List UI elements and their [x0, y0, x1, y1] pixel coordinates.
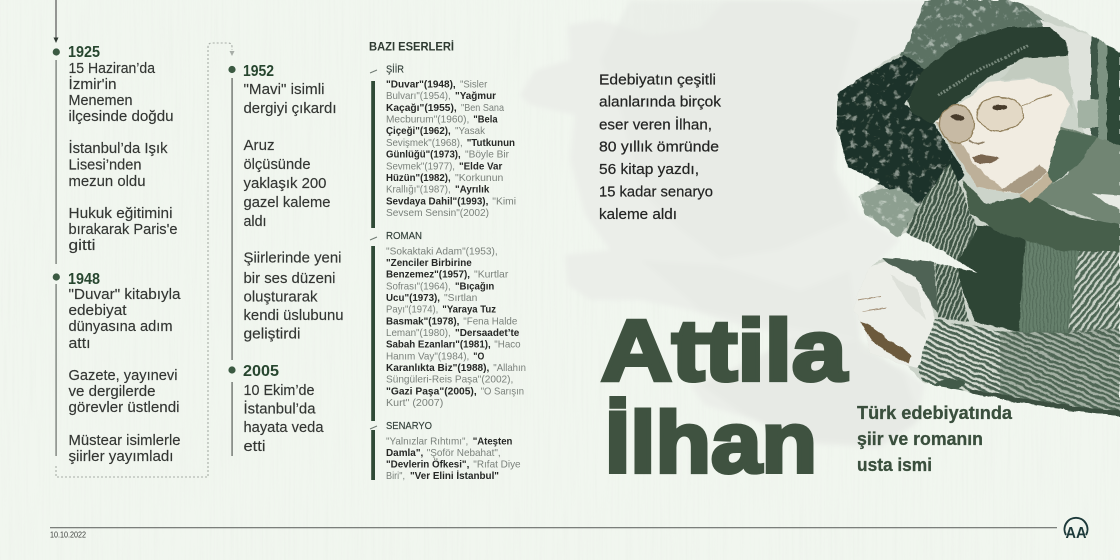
works list: "Sırtlan [444, 293, 477, 304]
section: Şiir [370, 63, 516, 228]
entry: 2005: etti [244, 438, 266, 455]
works list: "Ver Elini İstanbul" [410, 469, 499, 482]
works list: "Elde Var [459, 161, 502, 172]
works list: "Böyle Bir [465, 150, 510, 161]
works list: "Tutkunun [467, 138, 515, 149]
icon: dashed connector arrowhead [230, 51, 234, 56]
icon: AA logo: AA [1066, 525, 1086, 542]
works list: "Ayrılık [455, 185, 490, 196]
works list: "Allahın [493, 363, 526, 374]
works list: Sofrası"(1964), [386, 281, 451, 292]
scarf highlight [1093, 193, 1120, 212]
entry: 1925: ilçesinde doğdu [68, 108, 174, 125]
works list: Karanlıkta Biz"(1988), [386, 363, 489, 374]
works list: "Dersaadet’te [455, 328, 520, 339]
sleeve [918, 318, 1120, 420]
works list: "Yalnızlar Rıhtımı", [386, 436, 468, 447]
entry: 1948: "Duvar" kitabıyla [68, 286, 181, 303]
entry: 1952: Aruz [244, 137, 274, 154]
timeline connector: arrow into 1925 [54, 0, 58, 43]
works list: Kurt" (2007) [386, 398, 443, 409]
works list: "Rıfat Diye [473, 459, 521, 470]
dashed connector between timeline columns [56, 43, 232, 477]
entry: 1952: dergiyi çıkardı [244, 100, 336, 117]
bottom torn dark fringe [970, 392, 1120, 414]
intro paragraph: kaleme aldı [599, 207, 677, 223]
entry: 1952: gazel kaleme [244, 194, 330, 211]
hand [851, 262, 935, 368]
entry: 1952: oluşturarak [244, 288, 318, 306]
section tick and bar [370, 70, 377, 228]
entry: 1952: geliştirdi [244, 326, 300, 342]
section label: ROMAN [386, 231, 422, 242]
works list: Çiçeği"(1962), [386, 126, 451, 137]
entry: 1952: "Mavi" isimli [244, 81, 324, 98]
heading: Bazı Eserleri: BAZI ESERLERİ [369, 40, 454, 54]
works list: "Devlerin Öfkesi", [386, 457, 469, 470]
works list [386, 80, 516, 219]
shirt [955, 225, 1028, 335]
timeline rails [231, 78, 233, 456]
works list: "Ateşten [473, 436, 512, 447]
subtitle: usta ismi [857, 455, 932, 475]
entry: 1952: kendi üslubunu [244, 307, 344, 324]
works list: "O Sarışın [481, 386, 524, 397]
portrait photo [830, 0, 1120, 420]
works list: "Fena Halde [463, 316, 518, 327]
works list: Biri", [386, 471, 405, 482]
coat lapel [905, 163, 978, 322]
entry: 1952: Şiirlerinde yeni [244, 250, 342, 266]
works list: Basmak"(1978), [386, 316, 459, 327]
entry: 1948: attı [68, 335, 90, 352]
entry: 1925: bırakarak Paris'e [68, 221, 178, 238]
cigarette [860, 322, 912, 364]
entry: 1925: İstanbul’da Işık [68, 139, 168, 157]
entry: 2005 [243, 363, 324, 455]
hat [908, 27, 1068, 124]
works list: Benzemez"(1957), [386, 270, 470, 281]
entry: 1952: 1952 [243, 63, 274, 80]
works list: "Gazi Paşa"(2005), [386, 386, 477, 397]
subtitle [857, 403, 1013, 475]
face [936, 78, 1069, 194]
entry: 1948: Gazete, yayınevi [68, 367, 178, 384]
scarf neck side [1048, 130, 1098, 184]
entry: 1948: şiirler yayımladı [68, 448, 174, 465]
works list: "Ben Sana [461, 103, 504, 114]
entry: 1925: mezun oldu [68, 173, 146, 190]
timeline column 2 [228, 63, 344, 456]
scarf shoulder [1036, 126, 1120, 224]
intro paragraph: 15 kadar senaryo [599, 185, 713, 201]
works list: Sevmek"(1977), [386, 161, 455, 172]
entry: 1925: Menemen [68, 92, 132, 109]
works list: Krallığı"(1987), [386, 185, 451, 196]
icon: AA logo [1064, 518, 1088, 542]
entry: 1948: dünyasına adım [68, 318, 172, 335]
entry: 1952 [243, 63, 344, 342]
works list: "Yaraya Tuz [442, 305, 496, 316]
watercolor wash [520, 0, 930, 448]
subtitle: Türk edebiyatında [857, 403, 1013, 423]
works list: "Bela [473, 114, 498, 126]
timeline rails [55, 60, 57, 456]
works list: Sevsem Sensin"(2002) [386, 208, 489, 219]
entry: 1925: 15 Haziran’da [68, 60, 156, 77]
entry: 2005: 10 Ekim’de [244, 382, 314, 399]
hat band [938, 46, 1028, 96]
hand shading [890, 275, 925, 320]
entry: 1948 [68, 271, 181, 465]
mouth [972, 155, 1000, 163]
works list: "Bıçağın [455, 281, 494, 292]
works list: Sevdaya Dahil"(1993), [386, 196, 488, 207]
sleeve shading [1000, 328, 1120, 420]
works list: "Zenciler Birbirine [386, 258, 472, 269]
entry: 1925: gitti [68, 237, 96, 254]
title: Attila: Attila [601, 303, 848, 399]
entry: 1952: aldı [244, 213, 266, 230]
section tick and bar [370, 237, 377, 421]
entry: 2005: hayata veda [244, 419, 324, 436]
works list: Mecburum"(1960), [386, 114, 469, 126]
timeline column 1 [53, 44, 181, 465]
hair [1000, 55, 1072, 110]
entry: 1952: yaklaşık 200 [244, 175, 326, 192]
glasses [940, 94, 1052, 143]
intro paragraph [599, 72, 722, 223]
intro paragraph: Edebiyatın çeşitli [599, 72, 716, 88]
background: building top [900, 0, 1044, 70]
coat right [1068, 250, 1120, 333]
nose [968, 140, 985, 144]
date: 10.10.2022 [50, 531, 86, 540]
background: tree foliage [832, 55, 965, 207]
works list: "Sisler [460, 80, 488, 90]
mottling over foliage [836, 0, 1042, 230]
works list: Hüzün"(1982), [386, 173, 451, 184]
window frame [1078, 36, 1120, 148]
entry: 1925: İzmir'in [68, 75, 116, 93]
entry: 1925: Hukuk eğitimini [68, 205, 172, 222]
scarf [963, 180, 1120, 252]
works list: "Haco [494, 340, 521, 351]
works list: Kaçağı"(1955), [386, 103, 457, 114]
photo base [836, 2, 1098, 392]
works list: "O [473, 351, 484, 362]
works list: Sabah Ezanları"(1981), [386, 340, 491, 351]
eyes [951, 104, 1007, 120]
works list: Hanım Vay"(1984), [386, 351, 469, 362]
intro paragraph: alanlarında birçok [599, 95, 722, 111]
intro paragraph: eser veren İlhan, [599, 115, 712, 133]
works list: Damla", [386, 448, 423, 459]
works list: Payı"(1974), [386, 305, 438, 316]
section: Roman [370, 231, 526, 421]
works list: Leman"(1980), [386, 328, 451, 339]
entry: 1952: bir ses düzeni [244, 270, 336, 287]
works list: Sevişmek"(1968), [386, 138, 463, 149]
face shading [936, 122, 1005, 192]
works list: "Kimi [492, 196, 516, 207]
entry: 1948: edebiyat [68, 302, 127, 319]
entry: 1948: Müstear isimlerle [68, 432, 180, 449]
sleeve button [935, 379, 965, 389]
entry: 1948: görevler üstlendi [68, 399, 180, 416]
section label: ŞİİR [386, 63, 404, 76]
far cuff [880, 256, 938, 312]
section: Senaryo [370, 421, 521, 482]
section label: SENARYO [386, 421, 432, 432]
works list: "Sokaktaki Adam"(1953), [386, 246, 498, 257]
works list [386, 436, 521, 482]
title: İlhan: İlhan [605, 395, 817, 491]
works list: "Yağmur [455, 91, 496, 102]
entry: 1948: ve dergilerde [68, 383, 156, 400]
entry: 1952: ölçüsünde [244, 156, 310, 173]
timeline dots [228, 66, 236, 374]
entry: 1925 [68, 44, 178, 254]
footer rule [50, 527, 1057, 528]
works list: "Yasak [455, 126, 486, 137]
cardigan [1018, 240, 1080, 334]
works list: Günlüğü"(1973), [386, 150, 461, 161]
entry: 1925: 1925 [68, 44, 100, 61]
works list: "Korkunun [455, 173, 503, 184]
entry: 1925: Lisesi’nden [68, 156, 142, 174]
intro paragraph: 56 kitap yazdı, [599, 162, 699, 178]
works list: Bulvarı"(1954), [386, 91, 451, 102]
timeline dots [53, 48, 60, 281]
works list: "Kurtlar [474, 270, 509, 281]
works list: Süngüleri-Reis Paşa"(2002), [386, 375, 513, 386]
subtitle: şiir ve romanın [857, 429, 983, 449]
works list: "Duvar"(1948), [386, 80, 456, 90]
intro paragraph: 80 yıllık ömründe [599, 140, 719, 156]
works list [386, 246, 526, 409]
background: right wall [1040, 20, 1092, 136]
works list: "Şoför Nebahat", [427, 448, 501, 459]
entry: 1948: 1948 [68, 271, 100, 288]
section tick and bar [370, 426, 377, 480]
works list: Ucu"(1973), [386, 293, 440, 304]
entry: 2005: 2005 [243, 363, 279, 380]
entry: 2005: İstanbul’da [244, 400, 316, 418]
neck [1020, 172, 1052, 203]
background: lower foliage [858, 188, 920, 238]
